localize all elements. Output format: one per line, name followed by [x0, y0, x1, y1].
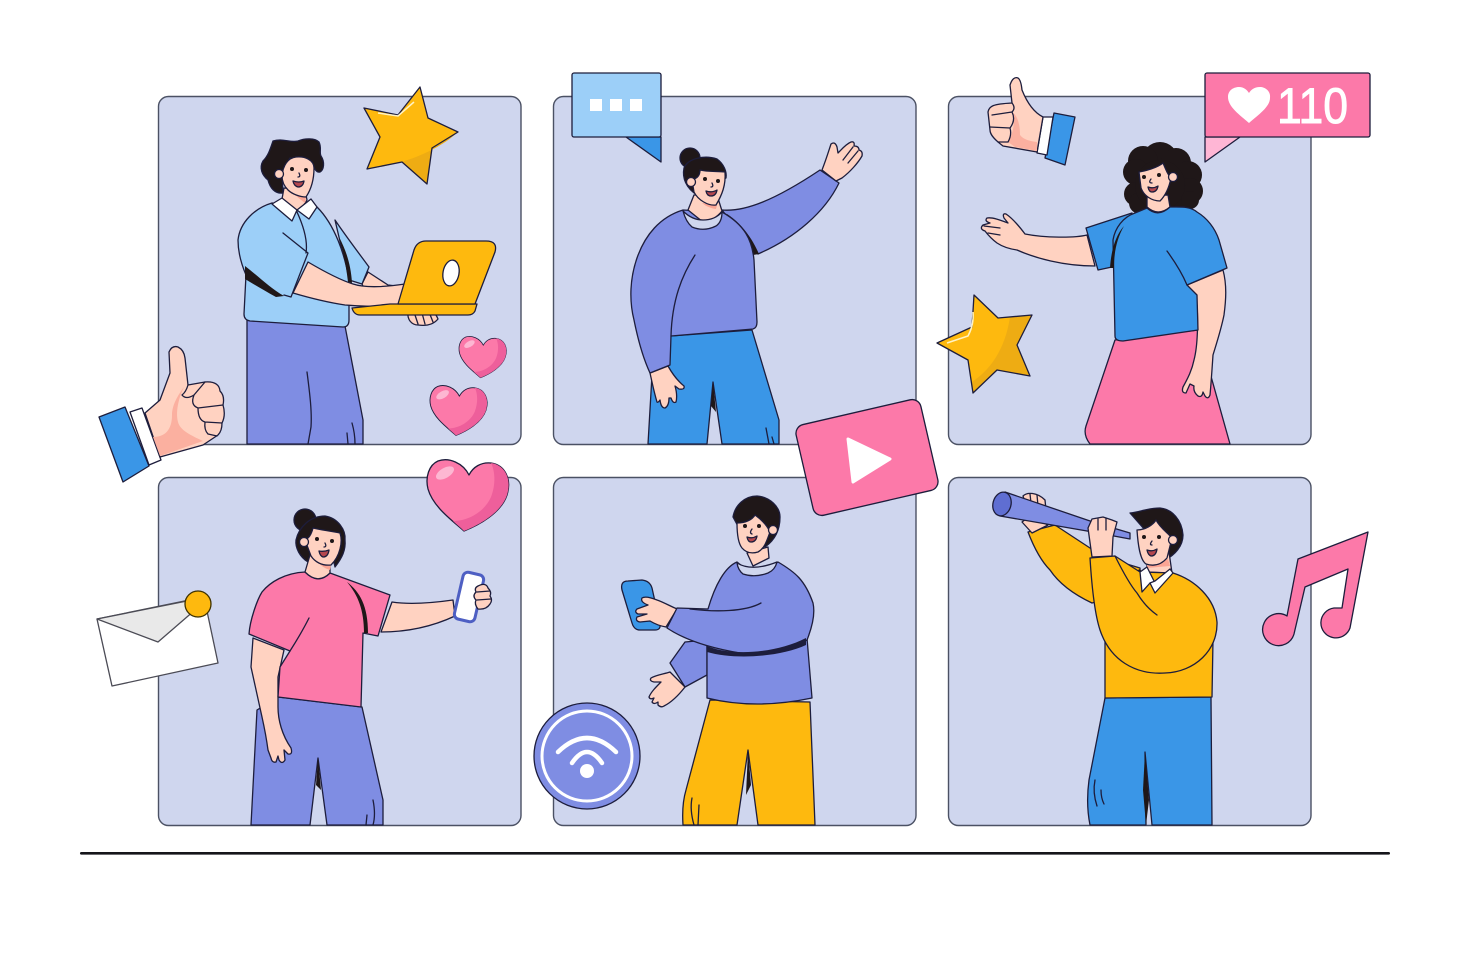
icon: thumbs up left — [99, 347, 224, 482]
panel: woman in pink skirt — [948, 96, 1311, 444]
text: like count: 110 — [1277, 78, 1348, 134]
panel: person with megaphone tube — [948, 478, 1311, 826]
icon: music note — [1263, 532, 1368, 646]
figure: man holding laptop — [238, 139, 496, 444]
figure: man with tablet — [622, 496, 815, 825]
icon: small heart upper — [459, 336, 506, 378]
panel: person with pink shirt and phone — [158, 478, 521, 826]
icon: gold star top left — [364, 87, 458, 184]
icon: wifi badge — [534, 703, 640, 809]
icon: small heart lower — [430, 386, 487, 435]
icon: white heart — [1228, 87, 1270, 123]
panel: person with tablet — [554, 478, 916, 826]
icon: thumbs up top right — [988, 78, 1075, 165]
figure: man in yellow sweater — [990, 490, 1217, 825]
icon: chat bubble — [572, 73, 661, 162]
panel: person with laptop — [158, 96, 521, 444]
icon: envelope with notification — [97, 591, 218, 686]
icon: like counter badge — [1205, 73, 1370, 162]
icon: video play button — [794, 398, 940, 517]
icon: gold star lower right — [937, 295, 1032, 393]
icon: large heart — [427, 460, 509, 531]
baseline — [80, 852, 1390, 855]
figure: woman holding phone — [249, 509, 492, 825]
figure: woman waving in periwinkle sweater — [631, 142, 862, 444]
panel: person waving — [554, 96, 916, 444]
figure: woman with curly hair — [981, 142, 1230, 444]
